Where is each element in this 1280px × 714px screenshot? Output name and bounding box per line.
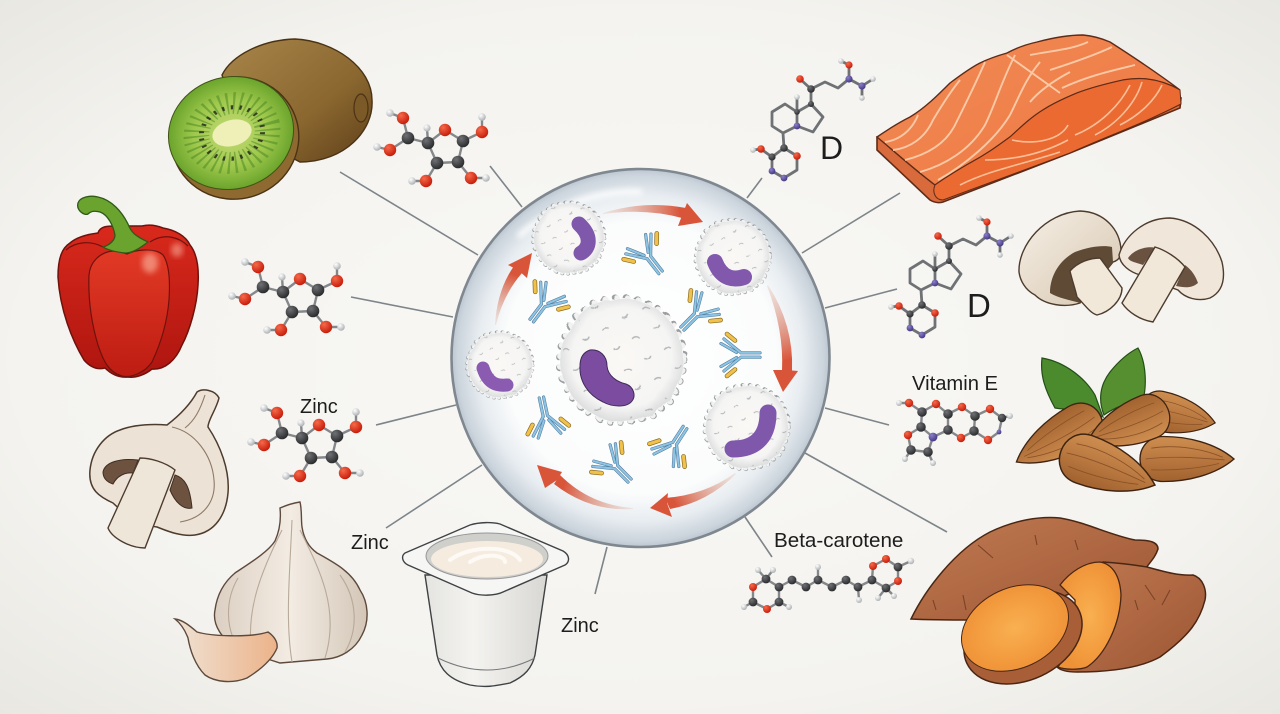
icon: garlic xyxy=(175,502,367,682)
salmon top surface xyxy=(877,35,1180,185)
middle slice flesh xyxy=(1058,562,1121,669)
connector lines xyxy=(340,166,947,594)
leaf right xyxy=(1101,348,1145,415)
antibody 7 xyxy=(587,438,644,495)
arrow: bottom right xyxy=(650,473,736,517)
garlic bulb xyxy=(214,502,367,663)
arrow: right xyxy=(767,285,798,392)
garlic clove xyxy=(175,619,277,682)
panel: immune cell sphere xyxy=(452,169,830,547)
pepper body xyxy=(58,225,198,377)
arrow: left xyxy=(495,253,532,325)
cup base line xyxy=(438,658,535,670)
mushroom cap xyxy=(90,390,228,535)
molecule: D top xyxy=(750,58,876,181)
icon: red bell pepper xyxy=(58,196,198,377)
left mushroom cap xyxy=(1019,211,1121,305)
icon: yogurt cup xyxy=(403,523,569,686)
molecule: D second xyxy=(888,215,1014,338)
antibody 5 xyxy=(521,393,570,440)
almond back xyxy=(1137,388,1219,442)
antibody 4 xyxy=(721,334,760,376)
kiwi rays and seeds xyxy=(190,95,274,171)
almond right xyxy=(1140,436,1234,482)
icon: kiwi xyxy=(156,39,372,213)
icon: almonds xyxy=(1005,348,1234,509)
yogurt xyxy=(431,541,543,577)
label: D second: D xyxy=(967,287,991,324)
salmon shadow edge xyxy=(877,98,1181,203)
pepper top folds xyxy=(66,237,188,250)
label: zinc left: Zinc xyxy=(300,396,338,418)
potato marks xyxy=(933,535,1170,610)
mushroom cap fold xyxy=(172,395,214,522)
label: beta-carotene: Beta-carotene xyxy=(774,529,903,552)
cup body xyxy=(425,575,547,686)
label: vitamin E: Vitamin E xyxy=(912,373,998,395)
almond left xyxy=(1005,395,1111,481)
icon: left mushroom xyxy=(90,390,228,548)
garlic ribs xyxy=(228,520,354,662)
icon: sweet potatoes xyxy=(911,518,1206,702)
kiwi half flesh xyxy=(156,63,306,203)
antibody 1 xyxy=(620,229,677,285)
antibody 3 xyxy=(668,286,725,343)
kiwi core xyxy=(209,115,255,151)
cup rim xyxy=(403,523,569,595)
right mushroom stem xyxy=(1122,247,1185,322)
sphere highlight xyxy=(520,192,640,235)
arrow: top xyxy=(603,203,703,226)
salmon front face xyxy=(934,79,1181,200)
sphere xyxy=(452,169,830,547)
molecule: beta-carotene xyxy=(741,555,914,613)
cup inner wall xyxy=(426,533,548,579)
potato right xyxy=(1057,562,1206,672)
whole kiwi xyxy=(222,39,372,162)
potato back xyxy=(911,518,1158,620)
kiwi navel xyxy=(354,94,368,122)
cell: left xyxy=(467,332,533,398)
pepper center lobe xyxy=(89,250,169,376)
molecule left xyxy=(228,258,345,336)
yogurt swirl xyxy=(450,549,520,562)
pepper stem xyxy=(78,196,148,253)
right mushroom cap xyxy=(1119,218,1224,300)
label: zinc bottom: Zinc xyxy=(561,615,599,637)
left mushroom stem xyxy=(1070,258,1122,315)
cell: bottom right xyxy=(705,385,789,469)
salmon face stripes xyxy=(960,82,1162,185)
right mushroom gills xyxy=(1128,247,1198,287)
leaf left xyxy=(1042,358,1103,417)
antibody 6 xyxy=(646,416,703,472)
almond front xyxy=(1052,427,1164,509)
left mushroom gills xyxy=(1050,246,1113,303)
pepper highlights xyxy=(142,253,158,273)
cell: large center xyxy=(560,298,684,422)
molecule: vitamin E xyxy=(896,399,1013,466)
label: D top: D xyxy=(820,130,843,166)
kiwi half skin xyxy=(157,63,313,213)
icon: salmon xyxy=(877,35,1181,203)
icon: button mushrooms xyxy=(1019,211,1224,322)
label: zinc lower left: Zinc xyxy=(351,532,389,554)
molecule near kiwi xyxy=(373,109,490,187)
salmon stripes xyxy=(885,42,1135,180)
cell: top right xyxy=(696,220,770,294)
antibody 2 xyxy=(515,277,572,333)
arrow: bottom left xyxy=(537,465,633,509)
mushroom stem xyxy=(108,458,175,548)
molecule zinc xyxy=(247,404,364,482)
front slice rim xyxy=(949,572,1097,702)
almond middle xyxy=(1080,388,1176,462)
mushroom gills xyxy=(103,460,192,508)
front slice flesh xyxy=(947,568,1083,688)
cell: top left xyxy=(534,203,604,273)
